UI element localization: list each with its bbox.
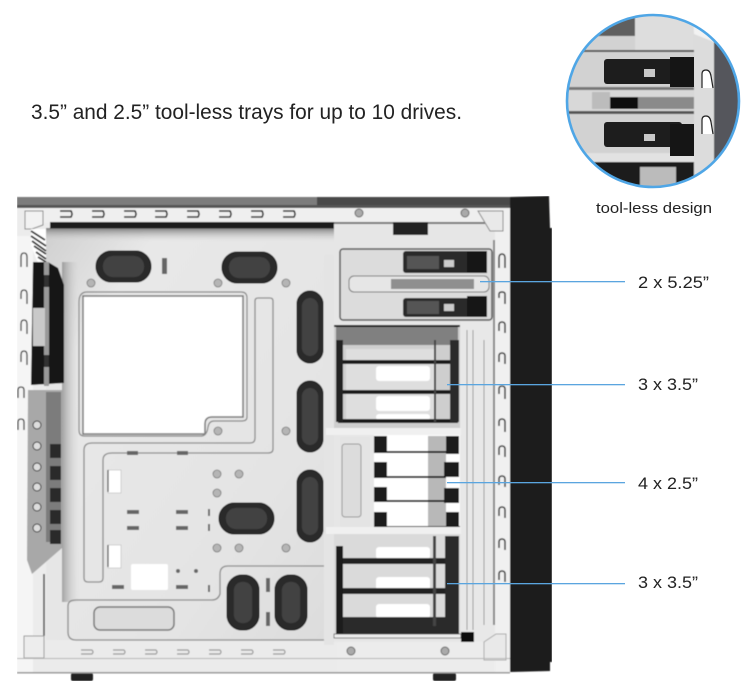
4 x 2.5 inch bay — [340, 435, 460, 529]
right column frame — [334, 222, 495, 642]
computer chassis — [17, 196, 552, 681]
callout: 3 x 3.5 inch top: 3 x 3.5” — [638, 375, 698, 394]
bottom edge — [17, 658, 510, 659]
striped corner — [31, 229, 46, 263]
rear fan — [31, 262, 64, 386]
inset handles — [604, 57, 713, 156]
back panel — [46, 228, 334, 640]
small mount marks — [112, 258, 270, 626]
left lower rail — [24, 574, 44, 658]
callout: 4 x 2.5 inch: 4 x 2.5” — [638, 474, 698, 493]
chassis body — [17, 208, 510, 673]
inset: tool-less design close-up — [566, 14, 745, 194]
5.25 inch bay — [340, 249, 492, 320]
expansion slots — [27, 390, 62, 574]
corner brackets — [478, 211, 503, 231]
right side rail with hooks — [495, 208, 510, 673]
inset caption: tool-less design — [596, 200, 712, 217]
callout: 2 x 5.25 inch: 2 x 5.25” — [638, 273, 709, 292]
callout: 3 x 3.5 inch bottom: 3 x 3.5” — [638, 573, 698, 592]
bottom rail — [28, 640, 338, 673]
top edge — [17, 197, 510, 208]
opening in tray — [83, 296, 243, 434]
drive bay divider — [326, 428, 461, 435]
3 x 3.5 inch bay bottom — [334, 534, 461, 638]
title: 3.5” and 2.5” tool-less trays for up to 10 drives. — [31, 100, 462, 124]
feet — [71, 673, 456, 681]
pressed ribs — [68, 298, 334, 640]
shadow band left of panel — [62, 262, 80, 602]
top rail — [25, 208, 495, 223]
rail screws — [347, 209, 469, 655]
standoffs — [87, 279, 290, 552]
inner right rails — [461, 322, 495, 642]
front panel — [510, 196, 552, 672]
inset border — [567, 15, 739, 187]
corner bracket — [25, 211, 43, 229]
left side rail — [17, 236, 33, 673]
motherboard holes — [108, 470, 168, 590]
rubber grommets — [96, 251, 323, 630]
3 x 3.5 inch bay top — [334, 325, 460, 430]
